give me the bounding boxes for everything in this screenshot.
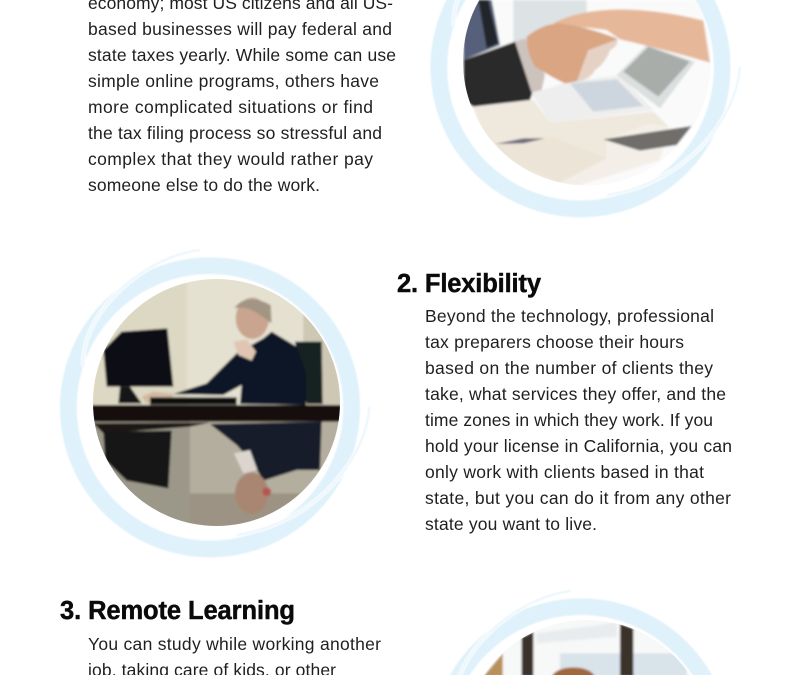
- image: man at computer in circular frame: [68, 250, 369, 549]
- text block: reason 2 body: tax preparers choose their hours: [425, 332, 684, 352]
- heading: 2. Flexibility: 2. Flexibility: [397, 270, 542, 298]
- text block: reason 2 body: state, but you can do it from any other: [425, 488, 731, 508]
- image: remote learner in circular frame: [450, 590, 712, 675]
- text block: reason 2 body: only work with clients based in that: [425, 462, 704, 482]
- text block: reason 1 body: the tax filing process so stressful and: [88, 123, 382, 143]
- text block: reason 2 body: based on the number of clients they: [425, 358, 713, 378]
- text block: reason 1 body: [88, 0, 396, 195]
- text block: reason 1 body: complex that they would rather pay: [88, 149, 373, 169]
- text block: reason 3 body: You can study while working another: [88, 634, 381, 654]
- text block: reason 1 body: more complicated situations or find: [88, 97, 373, 117]
- text block: reason 1 body: state taxes yearly. While some can use: [88, 45, 396, 65]
- text block: reason 1 body: someone else to do the work.: [88, 175, 320, 195]
- text block: reason 1 body: based businesses will pay federal and: [88, 19, 392, 39]
- text block: reason 2 body: time zones in which they work. If you: [425, 410, 713, 430]
- text block: reason 2 body: take, what services they offer, and the: [425, 384, 726, 404]
- text block: reason 2 body: hold your license in California, you can: [425, 436, 732, 456]
- text block: reason 3 body: [87, 634, 381, 675]
- text block: reason 2 body: state you want to live.: [425, 514, 597, 534]
- text block: reason 2 body: [425, 306, 732, 534]
- text block: reason 1 body: simple online programs, others have: [88, 71, 379, 91]
- image: handshake in circular frame: [439, 0, 740, 209]
- heading: 3. Remote Learning: 3. Remote Learning: [60, 597, 295, 625]
- text block: reason 2 body: Beyond the technology, professional: [425, 306, 714, 326]
